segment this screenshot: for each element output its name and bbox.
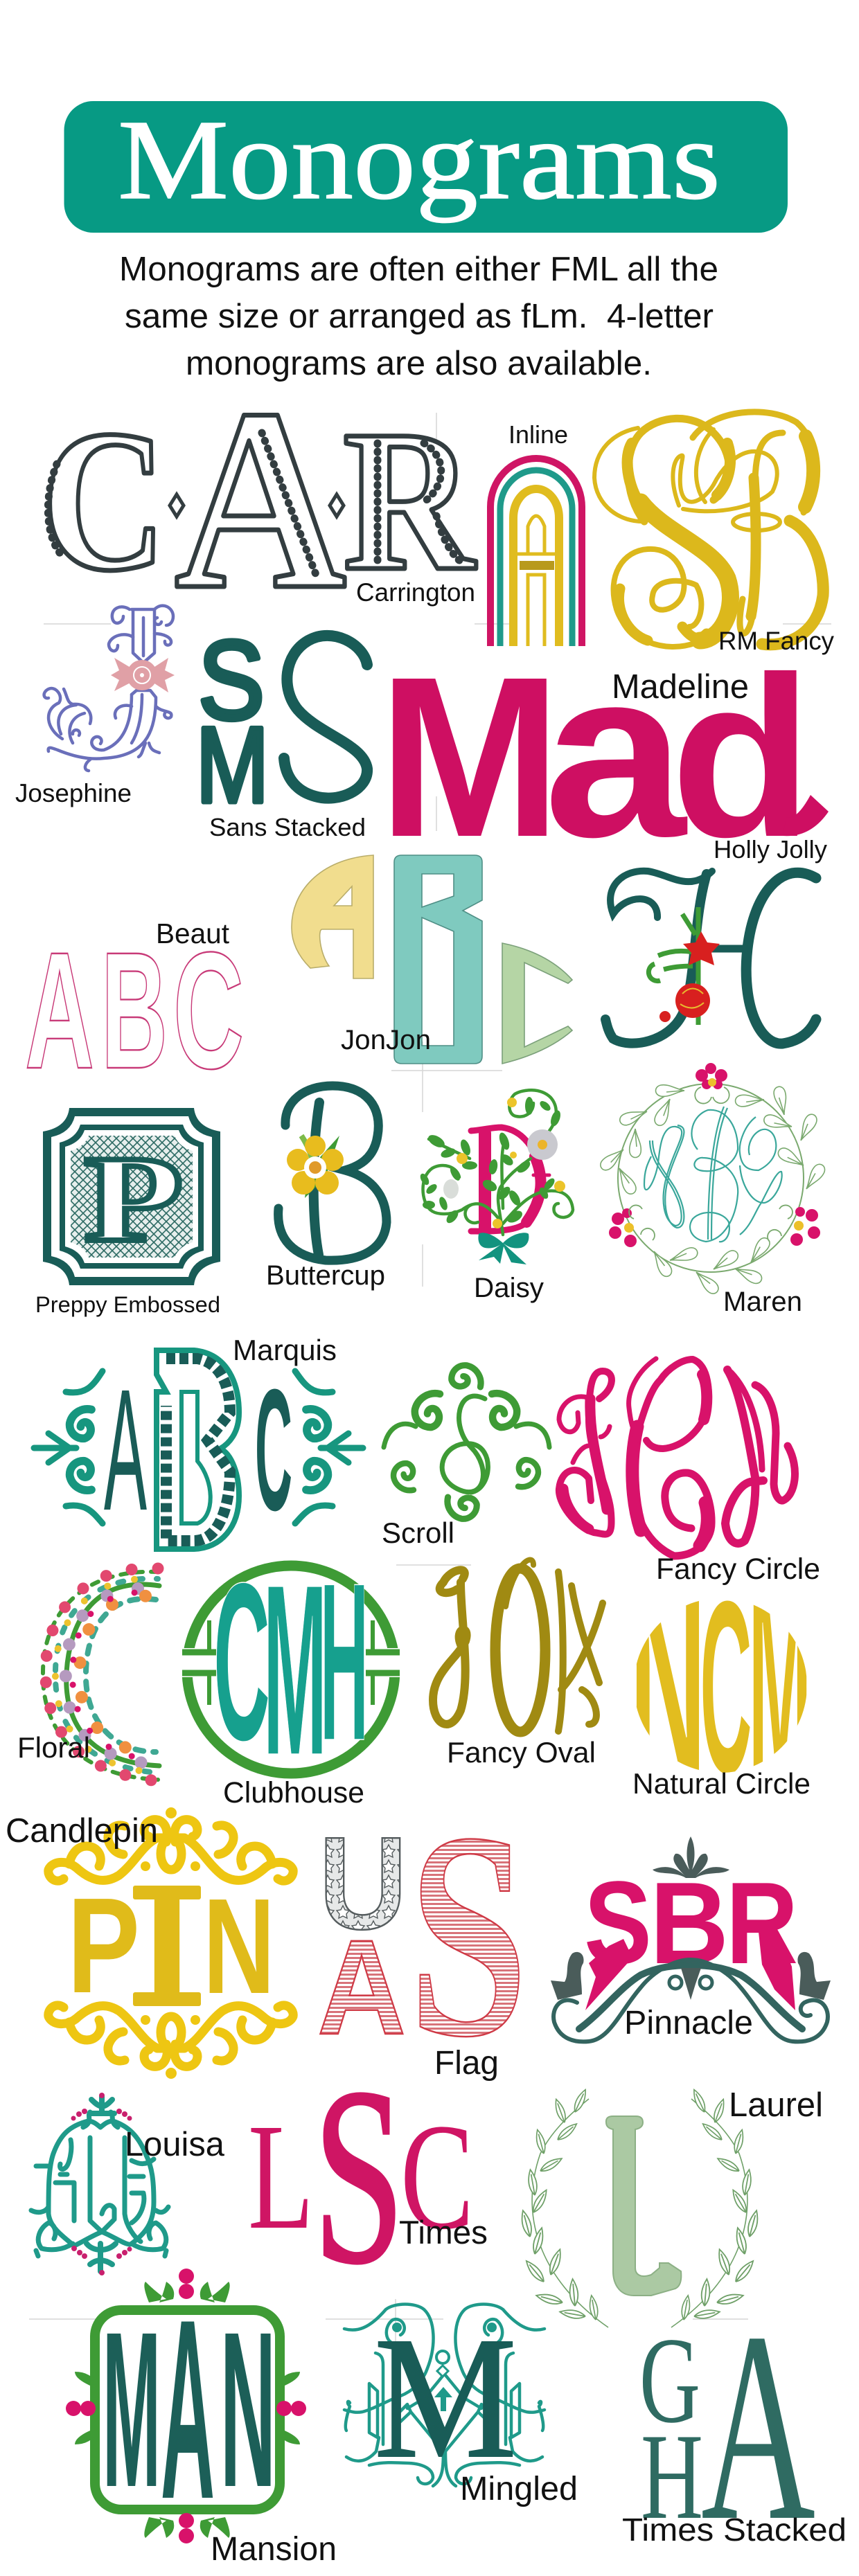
letter F (559, 1371, 612, 1535)
letters (67, 1848, 275, 2043)
letters: P (67, 1870, 140, 2021)
left ornament (34, 1371, 103, 1523)
monogram: RM Fancy (594, 412, 835, 655)
label: Carrington (356, 578, 475, 607)
label: Mansion (211, 2531, 337, 2568)
monogram: Flag: U (319, 1810, 407, 1957)
monogram: Holly Jolly (605, 835, 828, 1044)
label: Preppy Embossed (35, 1291, 220, 1317)
label: Josephine (15, 779, 132, 807)
leaves (418, 1097, 563, 1225)
monogram: Fancy Oval (433, 1559, 603, 1769)
label: Laurel (729, 2086, 823, 2124)
pink flower (111, 658, 175, 692)
faint guide lines (29, 413, 831, 2354)
label: Natural Circle (632, 1767, 811, 1800)
label: Candlepin (6, 1812, 158, 1850)
label: Pinnacle (624, 2004, 753, 2041)
monogram: Carrington: A (175, 356, 346, 643)
monogram: Clubhouse (177, 1533, 405, 1809)
label: Maren (723, 1287, 802, 1317)
monogram: Beaut: A (25, 918, 94, 1103)
monogram: Clubhouse: H (320, 1536, 369, 1787)
monogram: Times: S (313, 2036, 405, 2316)
monogram: Carrington: C (42, 389, 166, 613)
centre motif (436, 2351, 449, 2363)
frame (95, 2310, 280, 2510)
monogram: Mansion: N (220, 2285, 276, 2533)
monogram: Beaut: B (101, 918, 168, 1103)
monogram: Madeline: M (378, 629, 561, 884)
label: Louisa (125, 2126, 225, 2163)
left ornaments (344, 2305, 443, 2486)
label: Flag (434, 2045, 499, 2082)
arch (554, 1960, 828, 2041)
label: JonJon (341, 1025, 431, 1055)
right ornaments (445, 2305, 544, 2486)
monogram: Madeline: d (671, 629, 813, 884)
title: Monograms (118, 96, 720, 223)
flowers (609, 1063, 820, 1247)
monogram: Fancy Circle (559, 1359, 820, 1586)
small curls (629, 1087, 792, 1242)
letter P: P (85, 1130, 183, 1267)
flowers (527, 1129, 558, 1160)
monogram: Sans Stacked (196, 618, 367, 841)
monogram: Flag: A (317, 1912, 406, 2063)
bow (478, 1233, 529, 1264)
holly decoration (648, 907, 698, 1025)
monogram: Times: C (400, 2092, 474, 2261)
monogram: Times Stacked: H (641, 2408, 703, 2545)
monogram: Marquis: C (255, 1353, 292, 1546)
label: Daisy (474, 1273, 544, 1303)
flower (305, 1136, 339, 1198)
letters: C (213, 1536, 270, 1787)
monogram: Pinnacle (551, 1836, 831, 2041)
monogram: Carrington: R (343, 389, 477, 613)
monogram: Natural Circle (635, 1601, 809, 1794)
letters: A (161, 2266, 215, 2552)
monogram: Laurel (519, 2086, 823, 2327)
monogram: Floral (17, 1568, 159, 1781)
bottom ornament (48, 2005, 293, 2066)
monogram: Scroll (382, 1366, 549, 1549)
monogram: Flag (317, 1771, 528, 2098)
letters (644, 1107, 782, 1242)
monogram: Daisy (418, 1090, 573, 1303)
monogram: Marquis: A (104, 1353, 147, 1546)
title banner (64, 96, 788, 233)
vines (423, 1090, 573, 1235)
letter M: M (374, 2300, 517, 2494)
letters: R (726, 1858, 798, 1988)
label: Times Stacked (622, 2512, 847, 2548)
letters: S (584, 1857, 652, 1989)
monogram: Carrington (42, 356, 477, 643)
label: Inline (508, 420, 568, 449)
curls (392, 2323, 402, 2332)
monogram: Madeline: a (544, 620, 687, 887)
label: Sans Stacked (209, 813, 366, 841)
monogram: Josephine (15, 606, 175, 807)
scroll ornaments (551, 1952, 831, 2000)
label: Marquis (233, 1334, 337, 1366)
monogram: JonJon (292, 855, 572, 1064)
dots (71, 2093, 132, 2275)
label: Scroll (382, 1517, 454, 1549)
monogram: Natural Circle: N (629, 1529, 707, 1839)
monogram: Buttercup (266, 1086, 387, 1291)
top ornament (48, 1820, 293, 1881)
monogram: Beaut: C (173, 918, 244, 1103)
monogram: Times: L (248, 2092, 314, 2261)
letter M (725, 1370, 763, 1544)
berries (66, 2269, 306, 2543)
right wreath (671, 2088, 761, 2327)
label: Madeline (612, 668, 749, 706)
monogram: Louisa (31, 2093, 225, 2275)
crown (653, 1836, 729, 1878)
monogram: Sans Stacked: S (198, 618, 265, 743)
label: Beaut (156, 918, 229, 949)
label: Times (399, 2214, 488, 2251)
letter C (629, 1359, 656, 1433)
monogram: Preppy Embossed (35, 1108, 220, 1317)
monogram: Beaut (25, 918, 244, 1103)
monogram: Maren (598, 1063, 827, 1317)
intro text (119, 250, 718, 382)
monogram: Marquis (34, 1334, 363, 1549)
monogram: Times Stacked (622, 2276, 847, 2576)
top and bottom fleurons (87, 2097, 116, 2271)
intro text: same size or arranged as fLm. 4-letter (125, 297, 714, 335)
leaves (75, 2282, 300, 2538)
label: Holly Jolly (714, 835, 828, 864)
letters: M (103, 2285, 161, 2533)
label: Buttercup (266, 1260, 385, 1291)
intro text: monograms are also available. (186, 344, 652, 382)
label: Fancy Oval (447, 1736, 596, 1769)
label: Floral (17, 1731, 90, 1764)
letters: B (650, 1858, 729, 1988)
monogram: Inline (490, 420, 582, 646)
wreath leaves (598, 1085, 827, 1296)
intro text: Monograms are often either FML all the (119, 250, 718, 288)
monogram: Madeline (378, 620, 829, 887)
letters: I (143, 1848, 191, 2043)
monogram: Flag: S (409, 1771, 528, 2098)
letters: N (203, 1870, 275, 2022)
letter B (157, 1350, 239, 1549)
monogram: Mingled (344, 2300, 578, 2507)
monogram: Mansion (66, 2266, 337, 2568)
side bars (177, 1648, 222, 1677)
monogram: Sans Stacked: M (196, 705, 269, 825)
label: Mingled (460, 2470, 578, 2507)
label: RM Fancy (718, 627, 835, 655)
letters (584, 1857, 798, 2010)
monogram: Candlepin (6, 1807, 293, 2079)
label: Fancy Circle (656, 1553, 820, 1586)
letter L (606, 2116, 681, 2296)
right ornament (295, 1371, 363, 1523)
left wreath (519, 2088, 608, 2327)
monogram: Times Stacked: G (639, 2311, 700, 2449)
label: Clubhouse (223, 1776, 364, 1809)
letter D (471, 1127, 549, 1231)
monogram: Times (248, 2036, 488, 2316)
letters: M (263, 1533, 327, 1806)
